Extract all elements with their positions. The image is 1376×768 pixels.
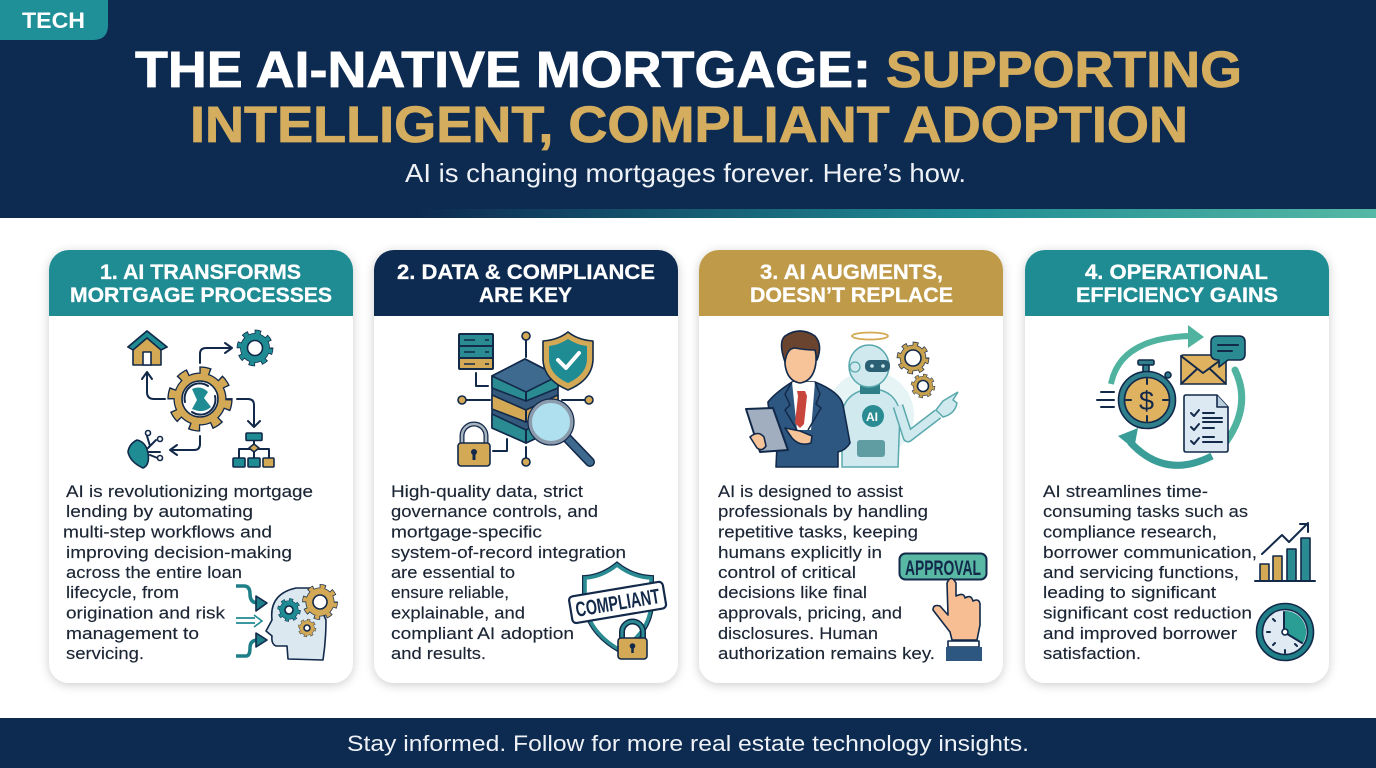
card 1 heading: MORTGAGE PROCESSES [70,284,332,307]
card 2 heading: ARE KEY [479,284,572,307]
icon: compliant shield with lock [568,565,667,659]
footer band [0,718,1376,768]
icon: approval button with pointing hand: APPROVAL [905,557,981,580]
card 4 heading [1025,250,1329,316]
card 2 body text: compliant AI adoption [391,624,574,643]
icon: approval button with pointing hand [900,554,986,661]
card 4 heading: EFFICIENCY GAINS [1076,284,1278,307]
title [135,41,1242,153]
card 1 body text: across the entire loan [66,563,242,582]
card 2 body text: High-quality data, strict [391,482,583,501]
card 1 heading [49,250,353,316]
card 1 body text: lifecycle, from [66,583,179,602]
card 3 body text: AI is designed to assist [718,482,903,501]
card 3 heading: 3. AI AUGMENTS, [760,261,943,284]
panel: card 4 operational efficiency [1025,250,1329,683]
panel: card 2 data and compliance [374,250,678,683]
card 1 body text: improving decision-making [66,543,292,562]
card 4 body text: significant cost reduction [1043,604,1252,622]
icon: businessman with tablet [746,331,850,467]
card 2 body text: explainable, and [391,604,525,622]
card 3 body text: decisions like final [718,583,867,602]
header band [0,0,1376,209]
card 2 body text: governance controls, and [391,502,598,521]
card 3 body text: control of critical [718,563,856,582]
card 2 body text: system-of-record integration [391,543,626,562]
card 4 body text: and improved borrower [1043,624,1237,643]
card 4 body text: AI streamlines time- [1043,482,1208,501]
card 1 body text: AI is revolutionizing mortgage [66,482,313,501]
panel: card 3 AI augments [699,250,1003,683]
card 1 body text: lending by automating [66,502,253,521]
card 1 body text: servicing. [66,644,144,663]
card 3 heading [699,250,1003,316]
card 3 body text: humans explicitly in [718,543,882,562]
icon: head with gears and input arrows [236,586,335,660]
card 4 body text: consuming tasks such as [1043,502,1248,521]
tag: TECH [0,0,108,40]
card 3 body text: approvals, pricing, and [718,604,902,622]
card 1 body text [63,482,313,663]
card 2 body text: and results. [391,644,486,663]
card 1 body text: management to [66,624,199,643]
icon: workflow gear cycle [128,331,274,468]
card 2 body text: ensure reliable, [391,583,509,602]
card 2 heading: 2. DATA & COMPLIANCE [397,261,655,284]
icon: clock [1256,604,1314,660]
card 4 body text: and servicing functions, [1043,563,1239,582]
gradient accent strip [0,209,1376,218]
card 3 body text: repetitive tasks, keeping [718,522,918,542]
card 3 body text [718,482,935,663]
icon: efficiency cycle with stopwatch, envelope and checklist [1097,325,1245,465]
card 3 heading: DOESN’T REPLACE [750,284,953,307]
icon: compliant shield with lock: COMPLIANT [574,585,662,622]
card 1 heading: 1. AI TRANSFORMS [100,261,301,284]
card 4 body text: leading to significant [1043,583,1216,602]
card 4 body text: compliance research, [1043,522,1217,542]
card 3 body text: disclosures. Human [718,624,878,643]
card 4 heading: 4. OPERATIONAL [1085,261,1268,284]
icon: data stack, shield, magnifier, lock [458,332,593,466]
card 2 body text: are essential to [391,563,515,582]
card 2 body text: mortgage-specific [391,522,543,542]
title: INTELLIGENT, COMPLIANT ADOPTION [190,96,1188,153]
card 2 body text [391,482,626,663]
card 3 body text: authorization remains key. [718,644,935,663]
subtitle: AI is changing mortgages forever. Here’s how. [405,158,966,188]
card 4 body text: borrower communication, [1043,543,1257,562]
card 1 body text: multi-step workflows and [63,522,272,542]
title: THE AI-NATIVE MORTGAGE: SUPPORTING [135,41,1242,98]
card 4 body text: satisfaction. [1043,644,1141,663]
panel: card 1 AI transforms mortgage processes [49,250,353,683]
icon: rising bar chart [1255,523,1315,581]
tag: TECH: TECH [22,8,85,33]
icon: efficiency cycle with stopwatch, envelope and checklist: $ [1139,386,1154,416]
footer text: Stay informed. Follow for more real estate technology insights. [347,731,1029,756]
card 3 body text: professionals by handling [718,502,928,521]
card 2 heading [374,250,678,316]
icon: robot assistant [826,332,958,467]
card 4 body text [1043,482,1257,663]
icon: robot assistant: AI [866,410,878,424]
card 1 body text: origination and risk [66,604,226,622]
